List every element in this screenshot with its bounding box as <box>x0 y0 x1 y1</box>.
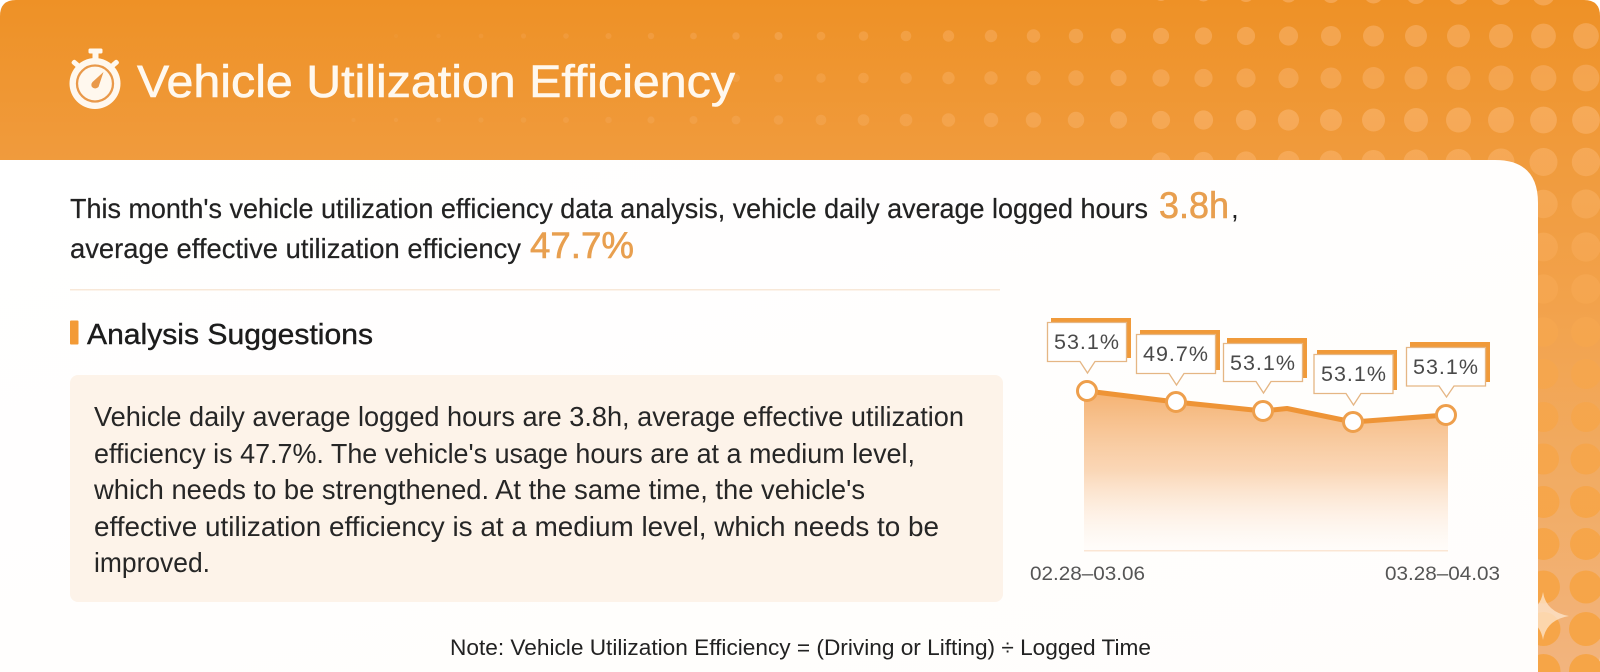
data label 5: 53.1% <box>1413 355 1478 379</box>
data label 4: 53.1% <box>1321 362 1386 386</box>
data label 2: 49.7% <box>1143 342 1208 366</box>
heading: analysis suggestions: Analysis Suggestions <box>87 319 373 351</box>
icon: sparkle <box>1517 592 1569 640</box>
summary text block <box>70 185 1239 266</box>
chart area fill <box>1084 392 1448 550</box>
footnote: Note: Vehicle Utilization Efficiency = (Driving or Lifting) ÷ Logged Time <box>450 635 1151 660</box>
summary text block: This month's vehicle utilization efficiency data analysis, vehicle daily average logged hours <box>70 193 1148 224</box>
data label 4 <box>1314 350 1397 405</box>
data label 3 <box>1224 338 1307 393</box>
panel: suggestions text box: improved. <box>94 547 210 578</box>
data label 1 <box>1048 318 1131 373</box>
panel: suggestions text box: which needs to be strengthened. At the same time, the vehicle's <box>93 474 865 505</box>
summary text block: 3.8h <box>1159 185 1229 226</box>
panel: suggestions text box: effective utilization efficiency is at a medium level, which needs to be <box>94 511 939 542</box>
x axis end label: 03.28–04.03 <box>1385 564 1500 585</box>
line chart <box>1030 318 1500 585</box>
icon: stopwatch <box>70 48 120 109</box>
title: Vehicle Utilization Efficiency <box>137 56 735 107</box>
chart line <box>1087 391 1446 422</box>
data label 3: 53.1% <box>1230 351 1295 375</box>
summary text block: 47.7% <box>530 225 634 266</box>
summary text block: , <box>1231 193 1239 224</box>
panel: suggestions text box: efficiency is 47.7%. The vehicle's usage hours are at a medium level, <box>94 438 915 469</box>
panel: suggestions text box: Vehicle daily average logged hours are 3.8h, average effective utilization <box>94 401 964 432</box>
data label 2 <box>1136 330 1220 385</box>
panel: suggestions text box <box>70 375 1003 602</box>
data label 1: 53.1% <box>1054 330 1119 354</box>
summary text block: average effective utilization efficiency <box>70 233 521 264</box>
x axis start label: 02.28–03.06 <box>1030 564 1145 585</box>
data label 5 <box>1406 342 1490 397</box>
panel: white content card <box>0 160 1538 672</box>
chart point markers <box>1078 382 1456 432</box>
